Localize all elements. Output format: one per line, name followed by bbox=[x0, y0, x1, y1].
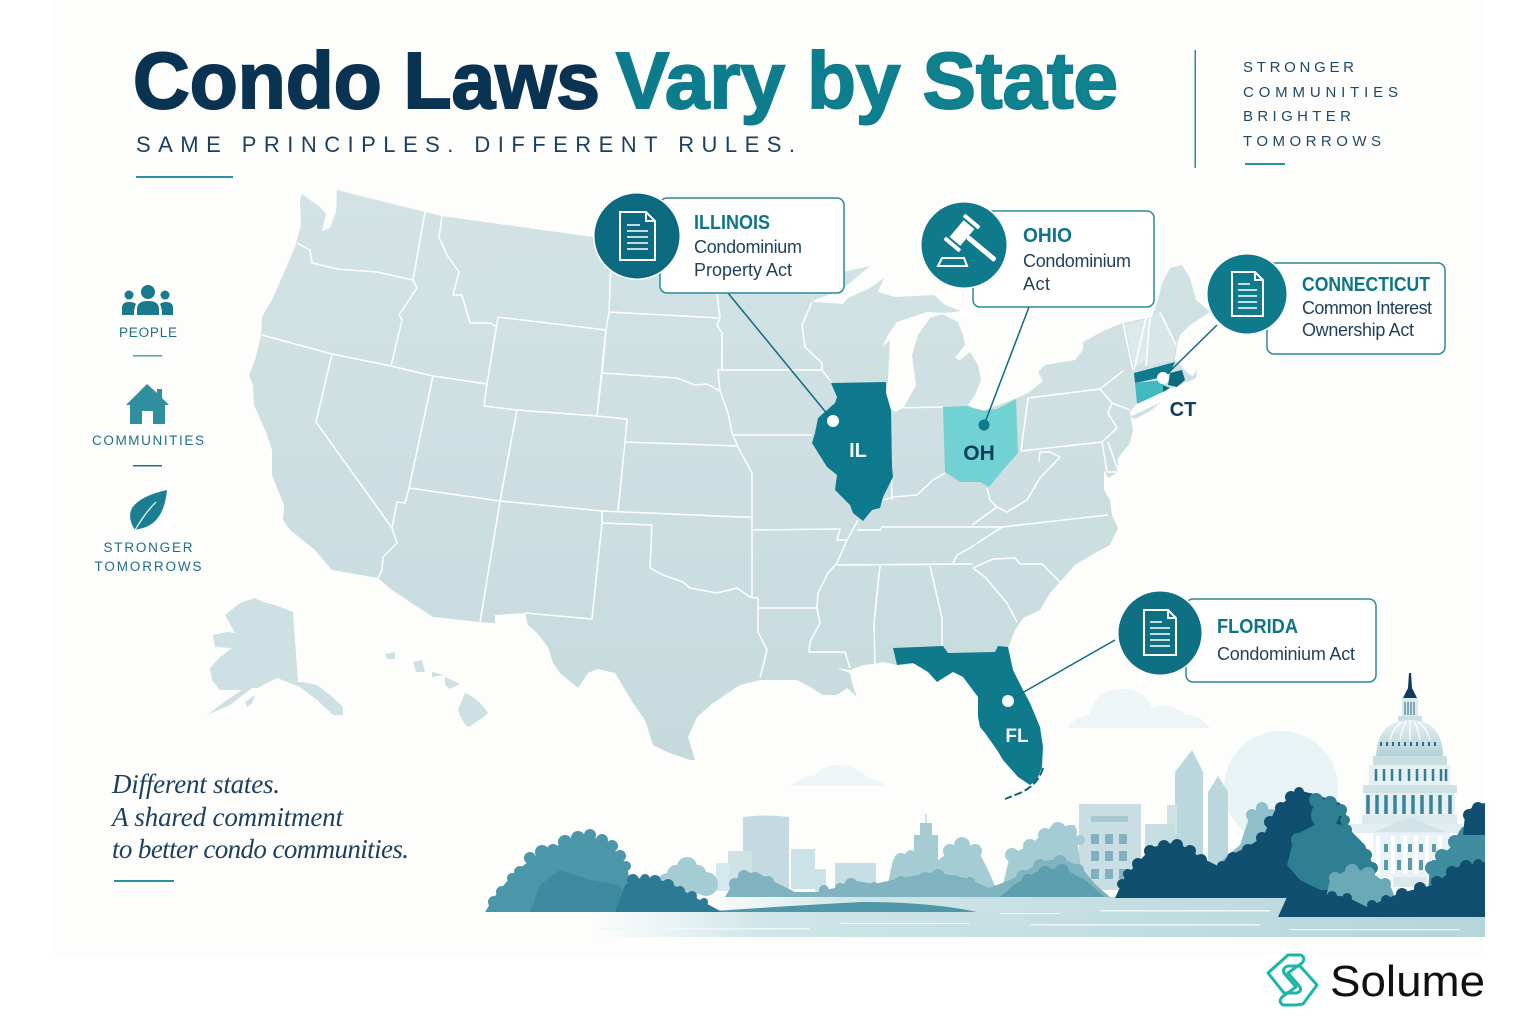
Alaska bbox=[207, 598, 343, 715]
callout: Illinois bbox=[593, 192, 844, 427]
background buildings right bbox=[1079, 750, 1228, 890]
subtitle underline bbox=[136, 176, 233, 178]
contiguous states base bbox=[249, 190, 1210, 760]
US map bbox=[207, 190, 1210, 799]
callout: Ohio: Condominium bbox=[1023, 251, 1131, 271]
tagline block: BRIGHTER bbox=[1243, 108, 1351, 125]
background buildings left bbox=[716, 814, 938, 893]
sidebar: people bbox=[119, 285, 177, 356]
left foreground trees bbox=[485, 829, 631, 912]
capitol bbox=[1347, 673, 1462, 887]
water highlights bbox=[600, 910, 1460, 930]
dark tree band bbox=[1115, 787, 1378, 898]
clouds bbox=[790, 689, 1210, 786]
icon: people bbox=[122, 285, 173, 315]
subtitle: SAME PRINCIPLES. DIFFERENT RULES. bbox=[136, 132, 795, 157]
skyline scene bbox=[485, 673, 1485, 937]
callout: Illinois: Condominium bbox=[694, 237, 802, 257]
Illinois bbox=[812, 382, 893, 521]
New England light tones bbox=[1125, 318, 1150, 368]
tagline block bbox=[1194, 50, 1398, 168]
sun bbox=[1224, 731, 1338, 845]
logo: Solume bbox=[1268, 955, 1485, 1006]
title: Condo Laws bbox=[133, 36, 600, 125]
tagline block: COMMUNITIES bbox=[1243, 84, 1398, 101]
closing statement: A shared commitment bbox=[110, 802, 344, 832]
sidebar: communities bbox=[92, 384, 204, 466]
callout: Illinois: Property Act bbox=[694, 260, 792, 280]
foreground dark trees right bbox=[1278, 802, 1485, 917]
callout: Connecticut: Ownership Act bbox=[1302, 320, 1414, 340]
callout: Florida: FLORIDA bbox=[1217, 616, 1298, 638]
background tree line bbox=[485, 822, 1110, 912]
callout: Ohio: OHIO bbox=[1023, 225, 1072, 247]
callout: Connecticut: CONNECTICUT bbox=[1302, 274, 1430, 296]
state label: FL: FL bbox=[1005, 726, 1029, 747]
Ohio bbox=[943, 399, 1018, 487]
state label: IL: IL bbox=[849, 440, 867, 462]
water back bbox=[700, 897, 1485, 937]
state label: CT: CT bbox=[1170, 399, 1196, 421]
Florida bbox=[893, 646, 1043, 785]
shoreline island bbox=[700, 902, 977, 912]
tagline block: STRONGER bbox=[1243, 59, 1354, 76]
title: Vary by State bbox=[616, 36, 1118, 125]
sidebar: stronger tomorrows bbox=[94, 490, 202, 574]
icon: house bbox=[126, 384, 169, 424]
callout: Florida: Condominium Act bbox=[1217, 644, 1355, 664]
icon: leaf bbox=[130, 490, 167, 532]
title bbox=[133, 36, 1118, 125]
callout: Connecticut: Common Interest bbox=[1302, 298, 1432, 318]
sidebar: communities: COMMUNITIES bbox=[92, 433, 204, 448]
callout: Illinois: ILLINOIS bbox=[694, 212, 770, 234]
sidebar: stronger tomorrows: TOMORROWS bbox=[94, 559, 202, 574]
Connecticut region bbox=[1134, 362, 1185, 404]
tagline block: TOMORROWS bbox=[1243, 133, 1381, 150]
closing statement: Different states. bbox=[111, 769, 280, 799]
sidebar: people: PEOPLE bbox=[119, 325, 177, 340]
callout: Ohio: Act bbox=[1023, 274, 1050, 294]
callout: Florida bbox=[1002, 590, 1376, 707]
Hawaii bbox=[385, 652, 488, 727]
Long Island and Cape Cod bbox=[1130, 370, 1197, 419]
closing statement bbox=[110, 769, 409, 882]
Florida Keys bbox=[1005, 768, 1043, 799]
logo wordmark: Solume bbox=[1330, 957, 1485, 1006]
sidebar: stronger tomorrows: STRONGER bbox=[104, 540, 193, 555]
logo mark bbox=[1268, 955, 1317, 1005]
water front bbox=[590, 912, 1485, 937]
state borders bbox=[262, 212, 1176, 678]
closing statement: to better condo communities. bbox=[112, 834, 409, 864]
state label: OH: OH bbox=[963, 442, 995, 465]
callout: Connecticut bbox=[1157, 253, 1445, 384]
callout: Ohio bbox=[920, 201, 1154, 430]
